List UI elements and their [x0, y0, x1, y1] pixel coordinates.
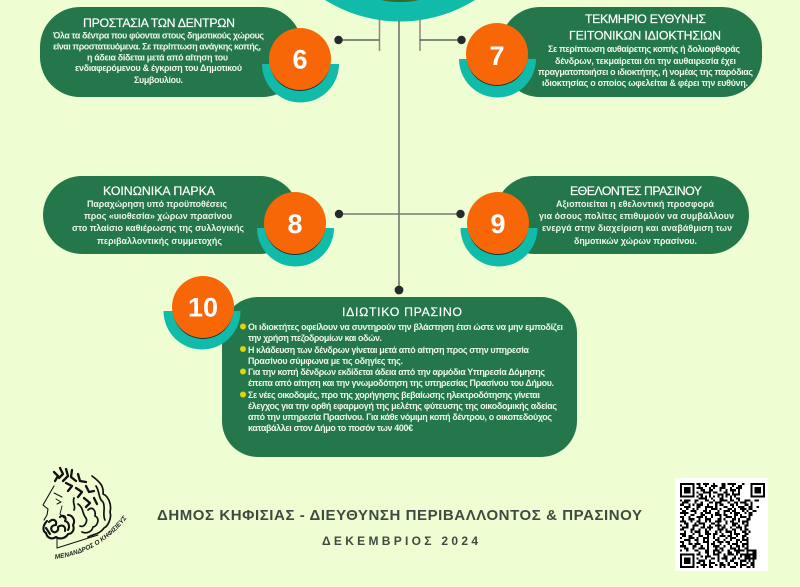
body text 8: Παραχώρηση υπό προϋποθέσεις: [87, 199, 227, 209]
body text 8: προς «υιοθεσία» χώρων πρασίνου: [84, 211, 232, 221]
body text 8: [72, 199, 244, 246]
heading 7: ΤΕΚΜΗΡΙΟ ΕΥΘΥΝΗΣ: [585, 12, 706, 26]
body text 10: την χρήση πεζοδρομίων και οδών.: [248, 333, 382, 343]
body text 10: Πρασίνου σύμφωνα με τις οδηγίες της.: [248, 356, 403, 366]
body text 6: η άδεια δίδεται μετά από αίτηση του: [87, 52, 228, 62]
body text 10: Για την κοπή δένδρων εκδίδεται άδεια από την αρμόδια Υπηρεσία Δόμησης: [248, 367, 545, 377]
heading 7: ΓΕΙΤΟΝΙΚΩΝ ΙΔΙΟΚΤΗΣΙΩΝ: [569, 28, 721, 42]
body text 6: Συμβουλίου.: [134, 75, 183, 85]
body text 10: καταβάλλει στον Δήμο το ποσόν των 400€: [248, 423, 413, 433]
heading 7: [569, 12, 721, 42]
logo caption: ΜΕΝΑΝΔΡΟΣ Ο ΚΗΦΙΣΙΕΥΣ: [55, 515, 126, 559]
body text 10: έλεγχος για την ορθή εφαρμογή της μελέτης φύτευσης της οικοδομικής αδείας: [248, 401, 557, 411]
body text 9: [539, 199, 734, 246]
body text 6: Όλα τα δέντρα που φύονται στους δημοτικούς χώρους: [52, 30, 264, 40]
body text 10: Σε νέες οικοδομές, προ της χορήγησης βεβαίωσης ηλεκτροδότησης γίνεται: [248, 390, 541, 400]
body text 9: ενεργά στην διαχείριση και αναβάθμιση των: [542, 223, 732, 233]
body text 6: είναι προστατευόμενα. Σε περίπτωση ανάγκης κοπής,: [53, 42, 261, 52]
footer date: ΔΕΚΕΜΒΡΙΟΣ 2024: [322, 534, 478, 548]
body text 10: Η κλάδευση των δένδρων γίνεται μετά από αίτηση προς στην υπηρεσία: [248, 345, 530, 355]
bullets: [240, 324, 246, 398]
panel 9: green volunteers: [495, 176, 749, 254]
body text 9: για όσους πολίτες επιθυμούν να συμβάλλουν: [539, 211, 734, 221]
connector lines: [334, 20, 466, 294]
body text 8: στο πλαίσιο καθιέρωσης της συλλογικής: [72, 223, 244, 233]
heading 10: ΙΔΙΩΤΙΚΟ ΠΡΑΣΙΝΟ: [342, 305, 462, 319]
heading 8: ΚΟΙΝΩΝΙΚΑ ΠΑΡΚΑ: [103, 184, 216, 198]
body text 10: από την υπηρεσία Πρασίνου. Για κάθε νόμιμη κοπή δέντρου, ο οικοπεδούχος: [248, 412, 552, 422]
badge 10: 10: [188, 292, 218, 322]
QR code: [675, 478, 768, 571]
heading 6: ΠΡΟΣΤΑΣΙΑ ΤΩΝ ΔΕΝΤΡΩΝ: [83, 16, 235, 30]
badge 9: 9: [490, 209, 506, 239]
heading 9: ΕΘΕΛΟΝΤΕΣ ΠΡΑΣΙΝΟΥ: [570, 184, 702, 198]
body text 7: ιδιοκτησίας ο οποίος ωφελείται & φέρει την ευθύνη.: [542, 78, 748, 88]
logo: Menander head: [42, 466, 126, 559]
badge 8: 8: [287, 209, 303, 239]
body text 8: περιβαλλοντικής συμμετοχής: [97, 236, 222, 246]
panel 8: social parks: [43, 176, 299, 254]
panel 6: tree protection: [40, 7, 302, 97]
top circle (cropped): [258, 0, 542, 22]
badge 8: [257, 192, 334, 266]
body text 10: έπειτα από αίτηση και την γνωμοδότηση της υπηρεσίας Πρασίνου του Δήμου.: [248, 378, 554, 388]
body text 9: δημοτικών χώρων πρασίνου.: [574, 236, 697, 246]
body text 9: Αξιοποιείται η εθελοντική προσφορά: [556, 199, 715, 209]
badge 10: [164, 276, 240, 350]
badge 6: [262, 28, 339, 103]
body text 6: [52, 30, 264, 85]
panel 10: private greenery: [222, 297, 577, 457]
badge 7: 7: [489, 41, 505, 71]
body text 7: Σε περίπτωση αυθαίρετης κοπής ή δολιοφθοράς: [548, 44, 740, 54]
badge 9: [460, 192, 538, 266]
body text 10: [248, 322, 564, 433]
head drawing: [43, 468, 111, 548]
panel 7: neighbouring owners: [500, 7, 762, 97]
badge 7: [459, 23, 536, 97]
body text 7: πραγματοποιήσει ο ιδιοκτήτης, ή νομέας της παρόδιας: [538, 67, 753, 77]
badge 6: 6: [292, 44, 308, 74]
body text 10: Οι ιδιοκτήτες οφείλουν να συντηρούν την βλάστηση έτσι ώστε να μην εμποδίζει: [248, 322, 564, 332]
body text 6: ενδιαφερόμενου & έγκριση του Δημοτικού: [75, 63, 242, 73]
body text 7: [538, 44, 753, 88]
footer title: ΔΗΜΟΣ ΚΗΦΙΣΙΑΣ - ΔΙΕΥΘΥΝΣΗ ΠΕΡΙΒΑΛΛΟΝΤΟΣ & ΠΡΑΣΙΝΟΥ: [157, 507, 642, 524]
body text 7: δένδρων, τεκμαίρεται ότι την αυθαιρεσία έχει: [555, 56, 737, 66]
